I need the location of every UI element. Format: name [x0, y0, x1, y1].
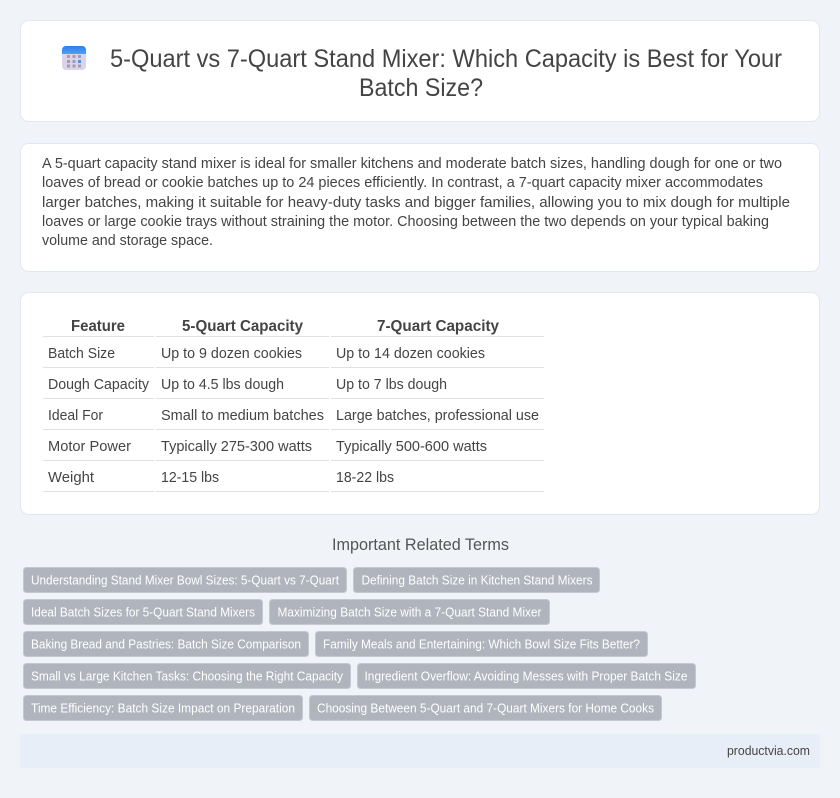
- table row: dough capacity: [48, 376, 447, 393]
- table row: motor power: Motor Power: [48, 438, 131, 455]
- table row: weight: 12-15 lbs: [161, 469, 219, 486]
- related term tags: Maximizing Batch Size with a 7-Quart Stand Mixer: [278, 604, 542, 620]
- heading: related terms: Important Related Terms: [332, 536, 509, 554]
- related term tags: Choosing Between 5-Quart and 7-Quart Mixers for Home Cooks: [317, 700, 654, 716]
- related term tags: Family Meals and Entertaining: Which Bowl Size Fits Better?: [323, 636, 640, 652]
- text block: intro paragraph: loaves or large cookie trays without straining the motor. Choosing between the two depends on your typical baking: [42, 213, 769, 230]
- table row: weight: Weight: [48, 469, 95, 486]
- text block: intro paragraph: [42, 155, 790, 249]
- table header: 7-Quart Capacity: [377, 318, 499, 335]
- footer: productvia.com: [727, 743, 810, 758]
- title: 5-Quart vs 7-Quart Stand Mixer: Which Capacity is Best for Your: [110, 45, 782, 73]
- table header: [71, 318, 499, 335]
- text block: intro paragraph: volume and storage space.: [42, 232, 213, 249]
- table row: batch size: [48, 345, 485, 362]
- panel: header: [20, 20, 820, 122]
- table row: dough capacity: Up to 4.5 lbs dough: [161, 376, 284, 393]
- table row: motor power: Typically 500-600 watts: [336, 438, 487, 455]
- related term tags: Ideal Batch Sizes for 5-Quart Stand Mixers: [31, 604, 255, 620]
- text block: intro paragraph: loaves of bread or cookie batches up to 24 pieces efficiently. In contrast, a 7-quart capacity mixer accommodates: [42, 174, 763, 191]
- table row: batch size: Up to 14 dozen cookies: [336, 345, 485, 362]
- table header: 5-Quart Capacity: [182, 318, 303, 335]
- panel: intro text: [20, 144, 820, 272]
- table row: motor power: Typically 275-300 watts: [161, 438, 312, 455]
- table row: ideal for: Large batches, professional use: [336, 407, 539, 424]
- text block: intro paragraph: larger batches, making it suitable for heavy-duty tasks and bigger families, allowing you to mix dough for multiple: [42, 194, 790, 211]
- text block: intro paragraph: A 5-quart capacity stand mixer is ideal for smaller kitchens and moderate batch sizes, handling dough for one or two: [42, 155, 782, 172]
- table header: Feature: [71, 318, 125, 335]
- table row: motor power: [48, 438, 487, 455]
- related term tags: Ingredient Overflow: Avoiding Messes with Proper Batch Size: [364, 668, 688, 684]
- table row: ideal for: Small to medium batches: [161, 407, 324, 424]
- title: [110, 45, 782, 102]
- table row: ideal for: Ideal For: [48, 407, 103, 424]
- icon: calendar: [62, 46, 86, 70]
- table row: weight: [48, 469, 394, 486]
- related term tags: Defining Batch Size in Kitchen Stand Mixers: [362, 572, 593, 588]
- panel: comparison table: [20, 292, 820, 514]
- related term tags: Baking Bread and Pastries: Batch Size Comparison: [31, 636, 301, 652]
- table row: dough capacity: Dough Capacity: [48, 376, 149, 393]
- related term tags: [24, 568, 696, 720]
- table row: batch size: Up to 9 dozen cookies: [161, 345, 302, 362]
- table row: dough capacity: Up to 7 lbs dough: [336, 376, 447, 393]
- related term tags: Small vs Large Kitchen Tasks: Choosing the Right Capacity: [31, 668, 343, 684]
- related term tags: Understanding Stand Mixer Bowl Sizes: 5-Quart vs 7-Quart: [31, 572, 339, 588]
- related term tags: Time Efficiency: Batch Size Impact on Preparation: [31, 700, 295, 716]
- table row: weight: 18-22 lbs: [336, 469, 394, 486]
- table row: batch size: Batch Size: [48, 345, 115, 362]
- title: Batch Size?: [359, 74, 483, 102]
- footer: [20, 734, 820, 768]
- table row: ideal for: [48, 407, 539, 424]
